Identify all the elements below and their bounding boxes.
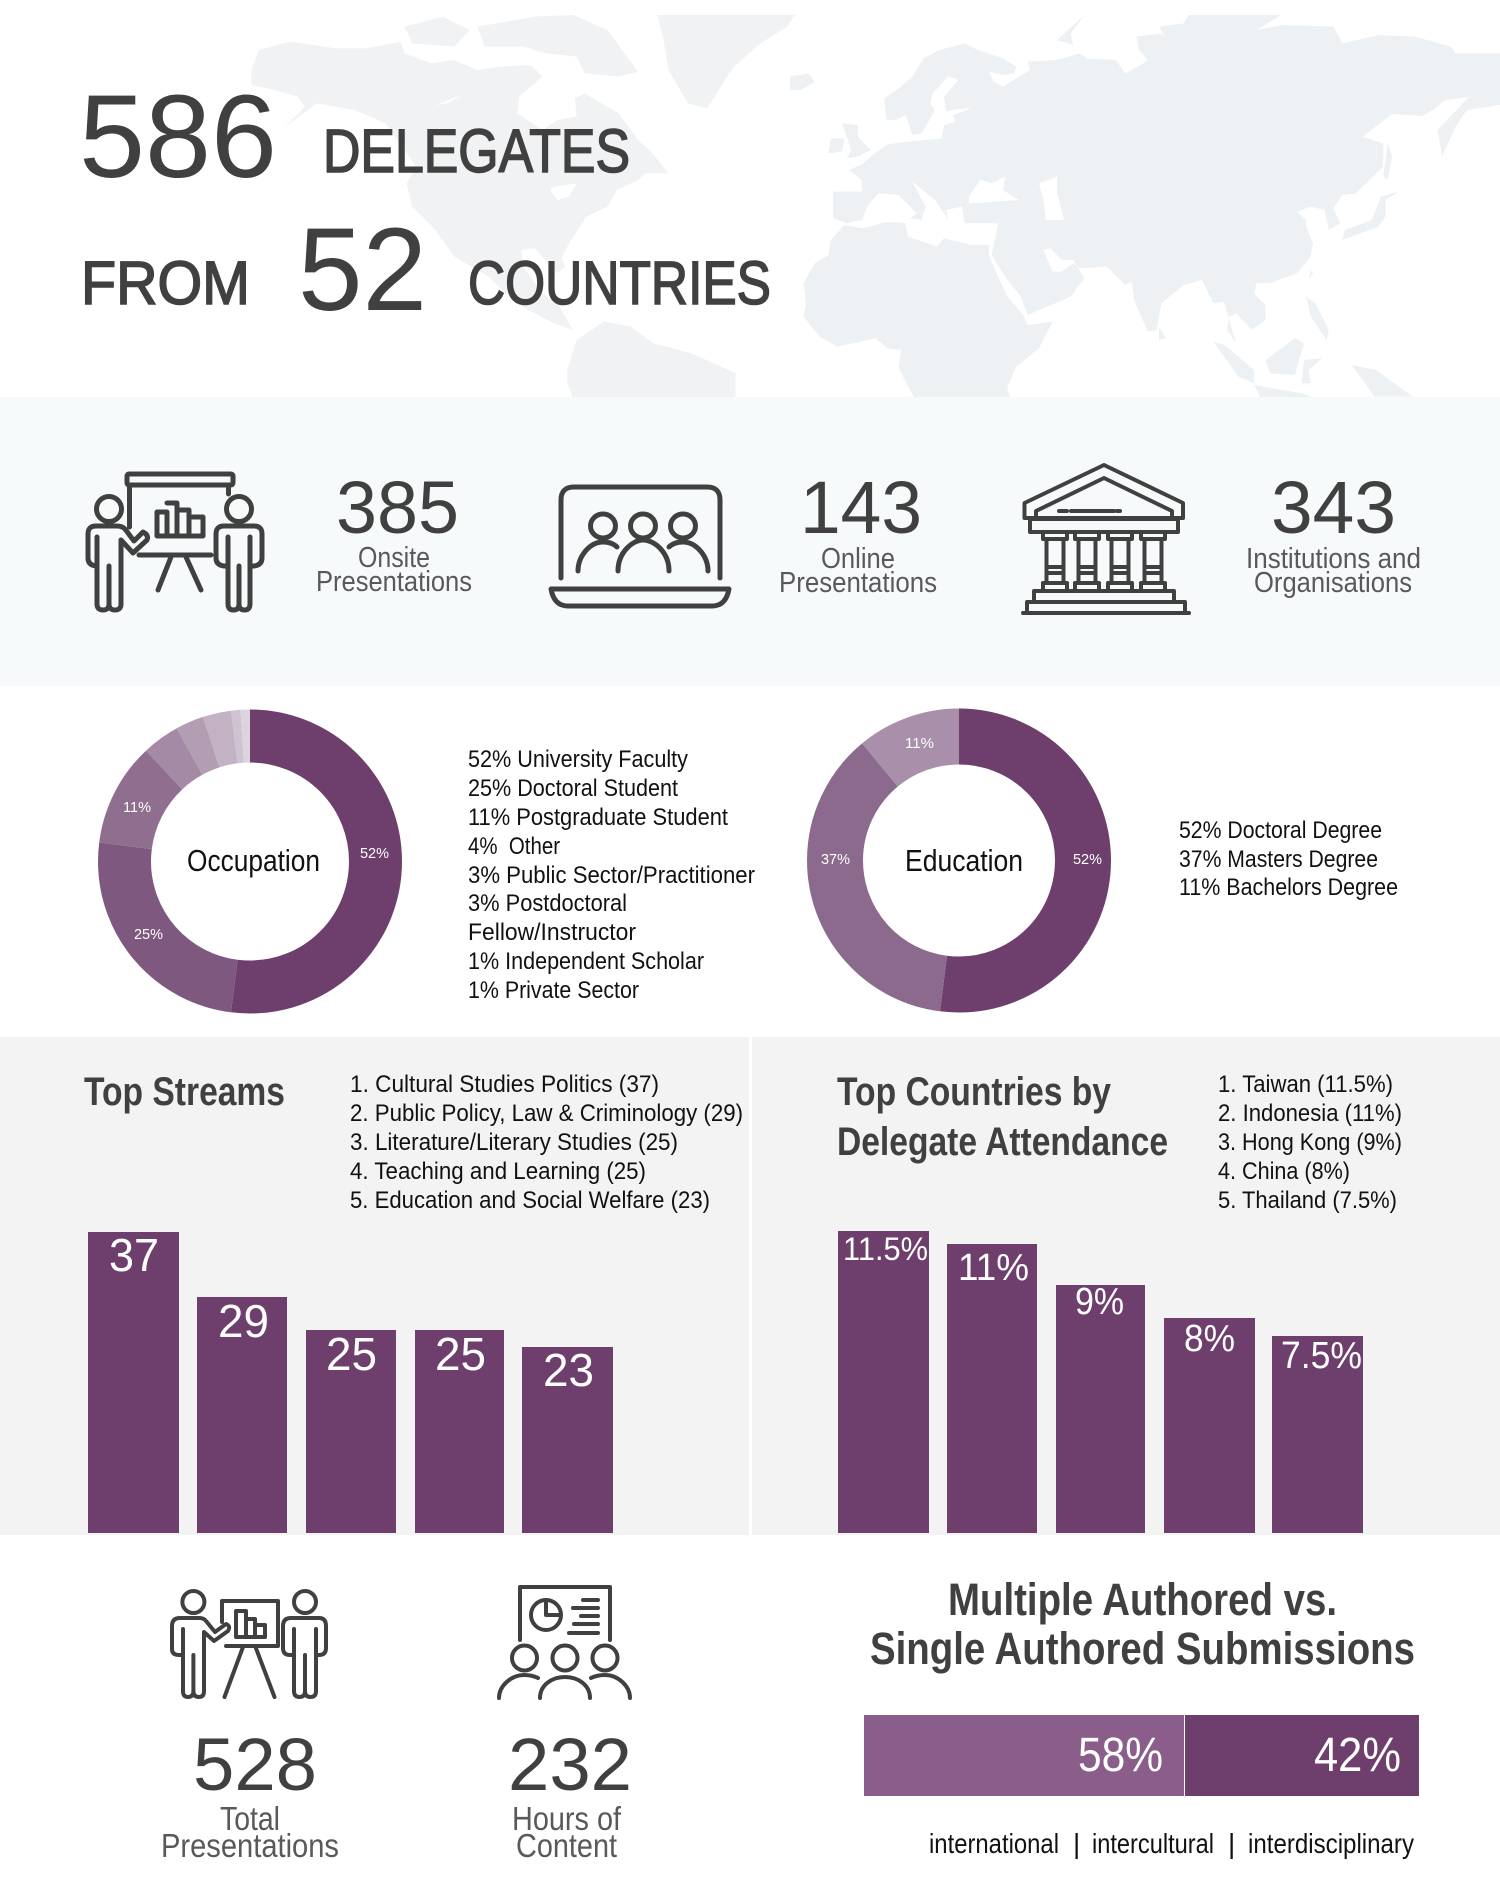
bar chart: top countries: 11% — [958, 1247, 1029, 1289]
bar chart: top countries: 8% — [1184, 1318, 1235, 1360]
chart: education donut: 11% — [905, 735, 934, 752]
heading: multiple vs single authored: Single Authored Submissions — [870, 1623, 1415, 1674]
stat: 528 total presentations: Presentations — [161, 1827, 339, 1864]
heading: top streams: Top Streams — [84, 1070, 285, 1114]
title: delegates and countries: FROM — [81, 249, 250, 317]
legend: occupation breakdown: 1% Private Sector — [468, 977, 639, 1004]
bar chart: top streams: 37 — [109, 1229, 159, 1281]
chart: occupation donut — [123, 736, 389, 987]
stat: 385 onsite presentations — [316, 466, 472, 598]
tagline: intercultural — [1092, 1828, 1214, 1859]
list: top countries: 5. Thailand (7.5%) — [1218, 1187, 1397, 1214]
stat: 343 institutions and organisations: Organisations — [1254, 567, 1412, 599]
legend: education breakdown: 11% Bachelors Degree — [1179, 874, 1398, 901]
legend: occupation breakdown: 25% Doctoral Student — [468, 775, 678, 802]
title: delegates and countries: DELEGATES — [323, 117, 630, 185]
list: top streams: 4. Teaching and Learning (25) — [350, 1158, 646, 1185]
list: top streams: 5. Education and Social Welfare (23) — [350, 1187, 710, 1214]
title: delegates and countries: COUNTRIES — [468, 249, 771, 317]
heading: top countries by delegate attendance: Top Countries by — [837, 1070, 1112, 1114]
bar chart: top countries: 9% — [1075, 1281, 1124, 1323]
list: top streams: 1. Cultural Studies Politics (37) — [350, 1071, 659, 1098]
tagline: interdisciplinary — [1248, 1828, 1414, 1859]
chart: education donut: Education — [905, 843, 1023, 878]
icon: laptop with audience — [551, 487, 729, 606]
bar chart: top countries: 11.5% — [843, 1231, 928, 1267]
title: delegates and countries: 586 — [79, 71, 277, 203]
title: delegates and countries: 52 — [298, 204, 427, 336]
stat: 232 hours of content — [508, 1723, 632, 1864]
stat: 528 total presentations: Total — [220, 1800, 280, 1837]
list: top countries: 1. Taiwan (11.5%) — [1218, 1071, 1393, 1098]
panel: top countries — [752, 1037, 1500, 1535]
heading: multiple vs single authored: Multiple Authored vs. — [948, 1574, 1337, 1625]
stat: 343 institutions and organisations — [1246, 466, 1421, 599]
bar chart: top streams: 29 — [218, 1295, 269, 1347]
bar chart: top streams: 23 — [543, 1344, 594, 1396]
stat: 385 onsite presentations: Presentations — [316, 566, 472, 598]
chart: education donut: 37% — [821, 851, 850, 868]
panel: presentation statistics band — [0, 397, 1500, 686]
heading: top countries by delegate attendance — [837, 1070, 1168, 1164]
chart: occupation donut: Occupation — [187, 843, 320, 878]
world map background — [251, 15, 1500, 398]
legend: occupation breakdown: 1% Independent Scholar — [468, 948, 704, 975]
chart: occupation donut: 52% — [360, 845, 389, 862]
list: top streams: 2. Public Policy, Law & Criminology (29) — [350, 1100, 743, 1127]
stat: 343 institutions and organisations: 343 — [1271, 466, 1396, 549]
stat: 143 online presentations: 143 — [800, 466, 922, 549]
stat: 385 onsite presentations: Onsite — [358, 542, 430, 574]
list: top countries — [1218, 1071, 1402, 1214]
bar chart: top countries — [838, 1231, 1363, 1533]
tagline: | — [1228, 1828, 1235, 1859]
legend: occupation breakdown: 11% Postgraduate Student — [468, 804, 728, 831]
stat: 343 institutions and organisations: Institutions and — [1246, 543, 1421, 575]
legend: education breakdown: 37% Masters Degree — [1179, 846, 1378, 873]
stacked bar: multiple vs single authored: 58% — [1078, 1729, 1163, 1782]
bar chart: top streams: 25 — [435, 1328, 486, 1380]
legend: education breakdown: 52% Doctoral Degree — [1179, 817, 1382, 844]
stacked bar: multiple vs single authored: 42% — [1314, 1729, 1401, 1782]
chart: occupation donut: 11% — [123, 799, 151, 816]
list: top streams — [350, 1071, 743, 1214]
chart: education donut — [821, 735, 1102, 984]
list: top countries: 4. China (8%) — [1218, 1158, 1350, 1185]
chart: occupation donut: 25% — [134, 926, 163, 943]
legend: occupation breakdown: 3% Public Sector/Practitioner — [468, 862, 755, 889]
heading: multiple vs single authored — [870, 1574, 1415, 1674]
stat: 528 total presentations — [161, 1723, 339, 1864]
stat: 528 total presentations: 528 — [193, 1723, 317, 1806]
bar chart: top streams — [88, 1229, 613, 1533]
stacked bar: multiple vs single authored — [864, 1715, 1419, 1796]
title: delegates and countries — [79, 71, 771, 336]
list: top countries: 2. Indonesia (11%) — [1218, 1100, 1402, 1127]
legend: occupation breakdown: 52% University Faculty — [468, 746, 688, 773]
stat: 143 online presentations: Presentations — [779, 567, 937, 599]
chart: education donut: 52% — [1073, 851, 1102, 868]
tagline — [929, 1828, 1414, 1859]
list: top countries: 3. Hong Kong (9%) — [1218, 1129, 1402, 1156]
legend: education breakdown — [1179, 817, 1398, 901]
icon: presenters with easel — [172, 1591, 326, 1697]
icon: institution building — [1023, 465, 1189, 613]
tagline: | — [1073, 1828, 1080, 1859]
stat: 143 online presentations: Online — [821, 543, 895, 575]
stat: 232 hours of content: 232 — [508, 1723, 632, 1806]
tagline: international — [929, 1828, 1059, 1859]
stat: 385 onsite presentations: 385 — [336, 466, 459, 549]
legend: occupation breakdown — [468, 746, 755, 1004]
stat: 143 online presentations — [779, 466, 937, 599]
icon: audience with presentation screen — [499, 1587, 630, 1698]
bar chart: top countries: 7.5% — [1281, 1335, 1362, 1377]
legend: occupation breakdown: 4% Other — [468, 833, 560, 860]
stat: 232 hours of content: Hours of — [512, 1800, 622, 1837]
stat: 232 hours of content: Content — [516, 1827, 617, 1864]
icon: presenters with board — [88, 474, 262, 610]
heading: top countries by delegate attendance: Delegate Attendance — [837, 1120, 1168, 1164]
list: top streams: 3. Literature/Literary Studies (25) — [350, 1129, 678, 1156]
panel: top streams — [0, 1037, 749, 1535]
bar chart: top streams: 25 — [326, 1328, 377, 1380]
legend: occupation breakdown: 3% Postdoctoral — [468, 890, 627, 917]
legend: occupation breakdown: Fellow/Instructor — [468, 919, 636, 946]
